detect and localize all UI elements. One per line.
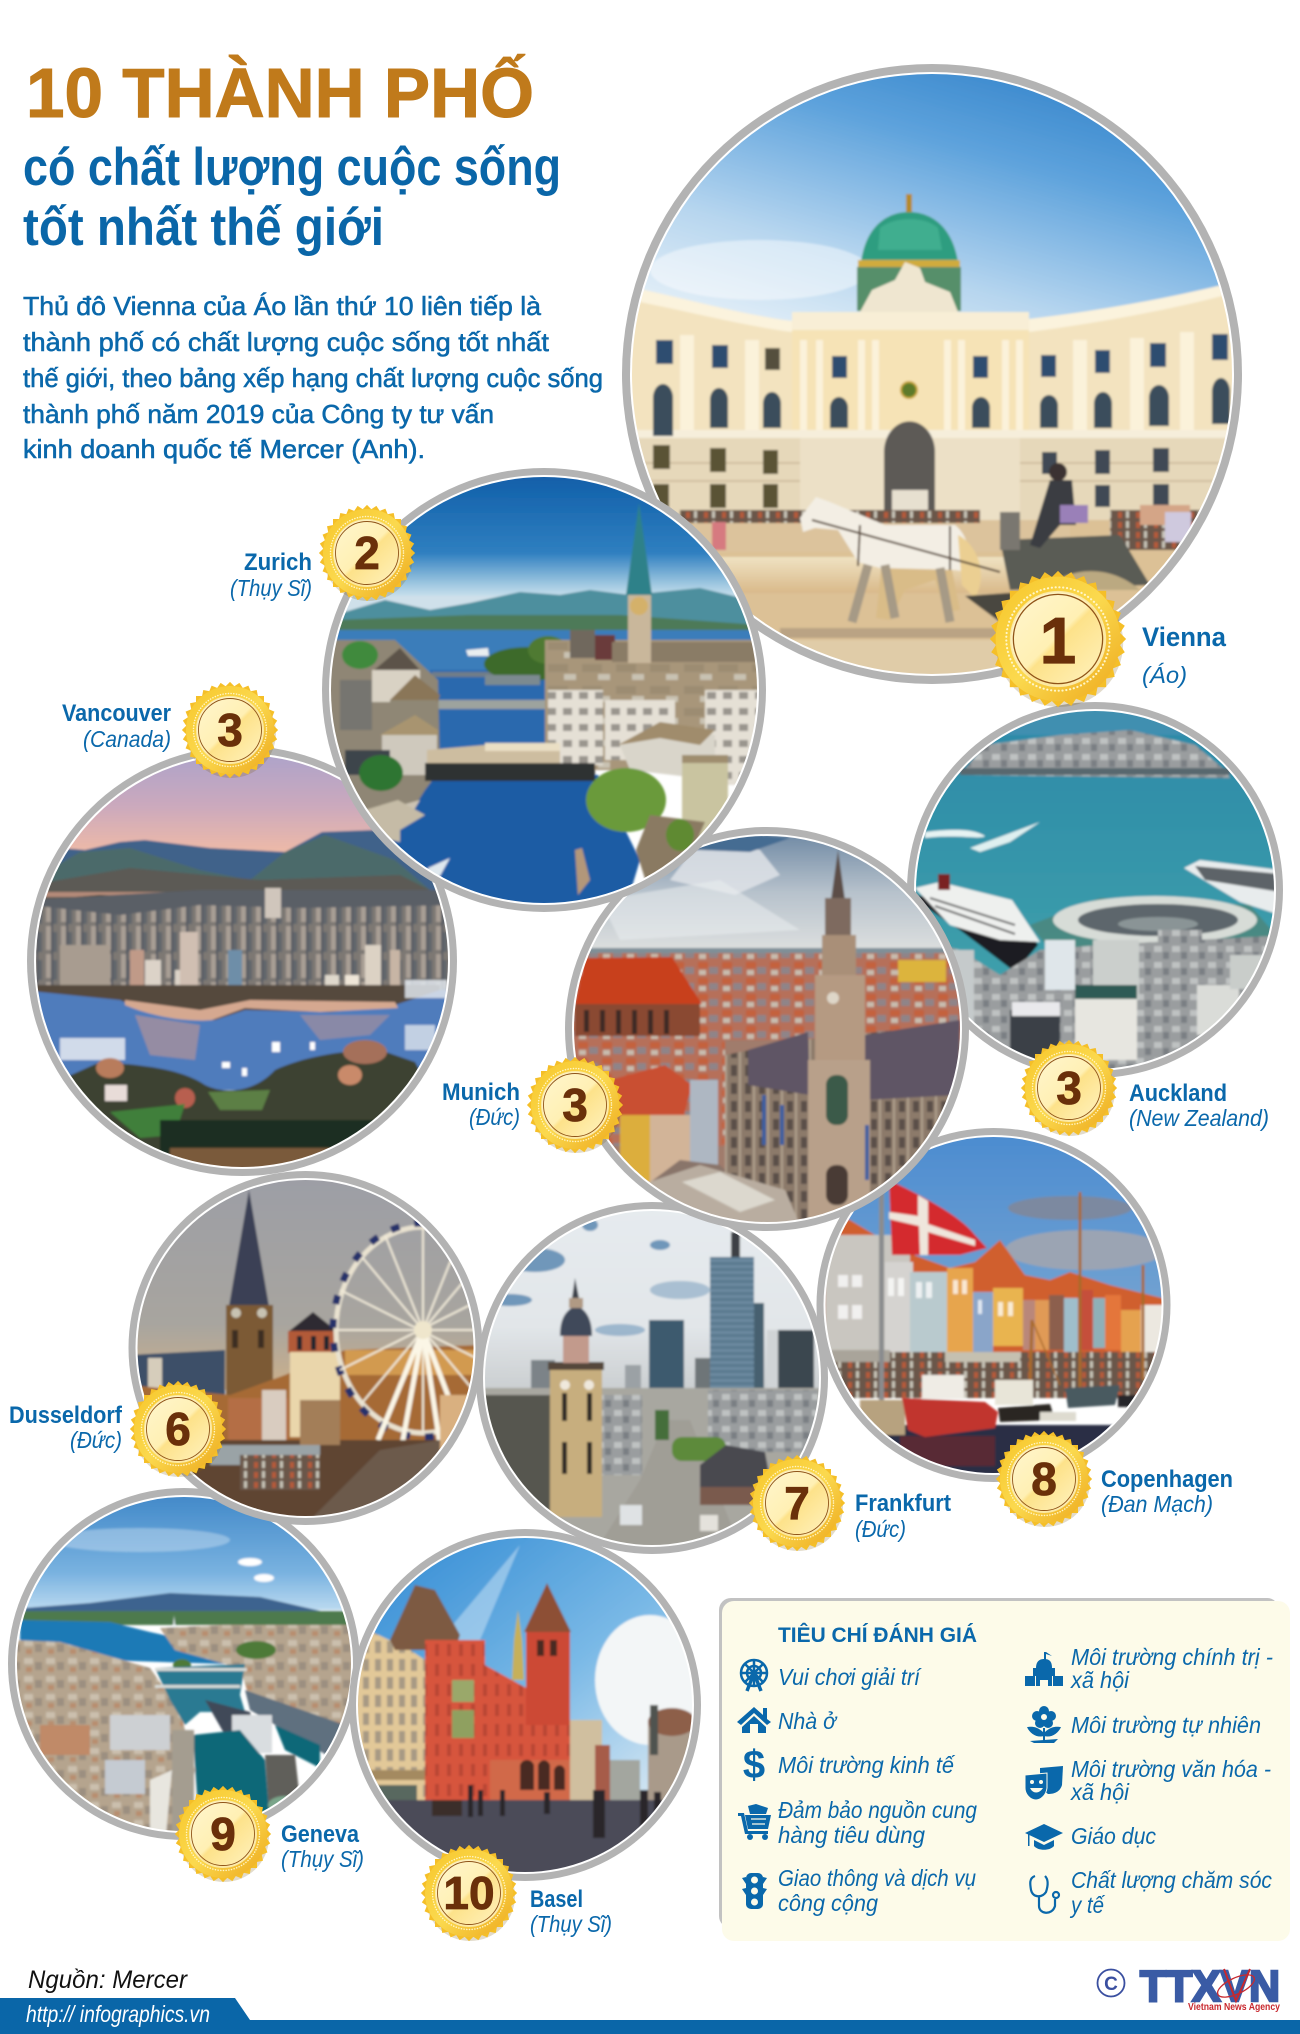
label: Zurich: Zurich	[244, 549, 312, 576]
Danish flag	[889, 1180, 987, 1255]
other boats	[995, 1380, 1144, 1422]
photo circle: Zurich	[320, 465, 770, 912]
dark roof building	[700, 1445, 772, 1490]
right bank buildings	[545, 630, 770, 845]
label: Basel	[530, 1886, 612, 1937]
label: Vancouver	[62, 700, 171, 752]
Schlossturm	[288, 1312, 340, 1437]
steamer	[466, 648, 489, 656]
text: housing: Nhà ở	[778, 1708, 838, 1734]
label: Dusseldorf: (Đức)	[70, 1427, 122, 1453]
icon: graduation cap	[1025, 1824, 1063, 1850]
label: Auckland	[1129, 1080, 1269, 1131]
text: nature: Môi trường tự nhiên	[1071, 1712, 1261, 1738]
Lake Geneva	[20, 1620, 232, 1664]
medal 9: 9	[210, 1808, 236, 1860]
label: Frankfurt: Frankfurt	[855, 1490, 951, 1517]
text: consumer goods: hàng tiêu dùng	[778, 1822, 925, 1848]
medal 3 Munich: 3	[562, 1079, 588, 1131]
label: Vancouver: Vancouver	[62, 700, 171, 727]
label: Basel: Basel	[530, 1886, 583, 1913]
Frauenkirche	[575, 957, 702, 1036]
medal 2	[319, 505, 415, 601]
mountains	[60, 828, 436, 892]
photo circle: Munich	[560, 825, 980, 1235]
medal 2: 2	[354, 527, 380, 579]
peninsula parkland	[70, 1038, 419, 1167]
photo circle: Dusseldorf	[125, 1170, 513, 1530]
Basel town hall	[390, 1583, 571, 1805]
text: transport: công cộng	[778, 1890, 878, 1916]
medal 1: 1	[1040, 604, 1076, 677]
Ferris wheel	[333, 1223, 513, 1445]
cruise ship left	[915, 874, 1040, 972]
label: Dusseldorf: Dusseldorf	[9, 1402, 123, 1429]
trees island	[484, 647, 570, 681]
Nyhavn facades	[826, 1218, 1162, 1354]
Rathaus tower	[808, 850, 870, 1230]
downtown towers	[952, 928, 1268, 1068]
text: politics: xã hội	[1070, 1667, 1130, 1693]
boat masts	[1030, 1192, 1143, 1390]
label: Geneva	[281, 1821, 364, 1872]
label: Basel: (Thụy Sĩ)	[530, 1911, 612, 1937]
label: Geneva: Geneva	[281, 1821, 360, 1848]
plaza ground	[717, 520, 1176, 642]
TTXVN logo: Vietnam News Agency	[1188, 2001, 1280, 2013]
label: Vienna	[1142, 622, 1227, 688]
back row buildings	[130, 1350, 225, 1400]
crowd	[680, 505, 1220, 550]
photo circle: Auckland	[900, 700, 1300, 1080]
downtown towers	[36, 886, 448, 990]
text: healthcare: Chất lượng chăm sóc	[1071, 1867, 1272, 1893]
intro paragraph: thế giới, theo bảng xếp hạng chất lượng cuộc sống	[23, 363, 603, 393]
photo circle: Geneva	[5, 1485, 365, 1845]
label: Zurich	[230, 549, 312, 601]
medal 3 Vancouver	[182, 682, 278, 778]
medal 7: 7	[784, 1477, 810, 1529]
label: Vienna: (Áo)	[1142, 662, 1187, 688]
Market square	[640, 1165, 800, 1225]
medal 9	[175, 1786, 271, 1882]
text: culture: Môi trường văn hóa -	[1071, 1756, 1271, 1782]
label: Copenhagen: Copenhagen	[1101, 1466, 1233, 1493]
intro paragraph	[23, 291, 603, 464]
label: Frankfurt	[855, 1490, 951, 1542]
pedestrians	[432, 1785, 661, 1838]
intro paragraph: thành phố có chất lượng cuộc sống tốt nhất	[23, 327, 550, 357]
palace facade	[620, 280, 1250, 522]
text: healthcare: y tế	[1069, 1892, 1106, 1918]
icon: house	[737, 1707, 771, 1733]
big tree	[586, 768, 666, 832]
St Catherine's church tower	[548, 1278, 604, 1517]
subtitle line 2: tốt nhất thế giới	[23, 198, 384, 257]
text: consumer goods: Đảm bảo nguồn cung	[778, 1797, 977, 1823]
subtitle line 1: có chất lượng cuộc sống	[23, 138, 561, 197]
text: culture: xã hội	[1070, 1779, 1130, 1805]
red boat	[902, 1375, 998, 1437]
Jet d'Eau	[172, 1616, 177, 1627]
intro paragraph: kinh doanh quốc tế Mercer (Anh).	[23, 434, 425, 464]
TTXVN logo: TTXVN	[1140, 1962, 1280, 2011]
cream corner building	[358, 1632, 427, 1802]
marinas	[60, 980, 447, 1076]
Rhône river	[155, 1664, 245, 1725]
label: Dusseldorf	[9, 1402, 123, 1453]
label: Vienna: Vienna	[1142, 622, 1227, 652]
source: Nguồn: Mercer	[28, 1966, 189, 1994]
legend title: TIÊU CHÍ ĐÁNH GIÁ	[778, 1623, 977, 1647]
street	[590, 1420, 745, 1560]
label: Munich: Munich	[442, 1079, 520, 1106]
church tower and spire	[226, 1190, 273, 1400]
medal 3 Vancouver: 3	[217, 704, 243, 756]
medal 10	[421, 1845, 517, 1941]
nave roof	[475, 1395, 552, 1530]
photo circle: Vancouver	[20, 745, 460, 1180]
text: consumer goods	[778, 1797, 977, 1848]
skyscrapers	[531, 1232, 814, 1394]
label: Munich	[442, 1079, 520, 1130]
medal 1	[990, 571, 1126, 707]
harbor water	[886, 1423, 1112, 1473]
intro paragraph: thành phố năm 2019 của Công ty tư vấn	[23, 399, 494, 429]
medal 6: 6	[165, 1403, 191, 1455]
label: Auckland: (New Zealand)	[1129, 1105, 1269, 1131]
left bank buildings	[320, 640, 440, 830]
text: entertainment: Vui chơi giải trí	[778, 1664, 922, 1690]
dome	[857, 194, 961, 312]
photo circle: Frankfurt	[475, 1200, 830, 1560]
city blocks	[475, 1388, 830, 1558]
bridges	[432, 672, 547, 709]
lower river	[388, 775, 640, 910]
cobbled square	[388, 1798, 663, 1872]
distant mountain	[26, 1592, 320, 1613]
label: Geneva: (Thụy Sĩ)	[281, 1846, 364, 1872]
label: Zurich: (Thụy Sĩ)	[230, 575, 312, 601]
label: Copenhagen: (Đan Mạch)	[1101, 1491, 1213, 1517]
icon: theatre masks	[1025, 1766, 1063, 1800]
medal 8: 8	[1031, 1453, 1057, 1505]
title: 10 THÀNH PHỐ	[26, 53, 534, 132]
cruise ship right	[1184, 860, 1280, 915]
label: Munich: (Đức)	[469, 1104, 520, 1130]
text: politics: Môi trường chính trị -	[1071, 1644, 1273, 1670]
label: Auckland: Auckland	[1129, 1080, 1227, 1107]
label: Copenhagen	[1101, 1466, 1233, 1517]
icon: capitol	[1025, 1652, 1063, 1686]
lower city	[130, 1345, 480, 1465]
text: education: Giáo dục	[1071, 1823, 1156, 1849]
intro paragraph: Thủ đô Vienna của Áo lần thứ 10 liên tiếp là	[23, 291, 542, 321]
upper river	[430, 670, 555, 760]
photo circle: Basel	[349, 1529, 710, 1885]
promenade	[125, 1395, 490, 1530]
icon: stethoscope	[1030, 1876, 1059, 1913]
label: Frankfurt: (Đức)	[855, 1516, 906, 1542]
text: politics	[1070, 1644, 1273, 1693]
photo circle: Copenhagen	[816, 1125, 1170, 1485]
medal 6	[130, 1381, 226, 1477]
photo circle: Vienna	[620, 60, 1250, 700]
label: Vancouver: (Canada)	[83, 726, 171, 752]
flag pole	[879, 1190, 884, 1435]
medal 3 Auckland	[1021, 1040, 1117, 1136]
legend panel	[719, 1598, 1290, 1941]
New Town Hall	[725, 1020, 970, 1220]
icon: ferris wheel	[741, 1660, 767, 1691]
medal 3 Auckland: 3	[1056, 1062, 1082, 1114]
mountains	[335, 588, 750, 632]
TTXVN logo: C	[1104, 1974, 1118, 1995]
Quay buildings	[205, 1690, 345, 1760]
text: economy: Môi trường kinh tế	[778, 1752, 956, 1778]
far city	[560, 950, 980, 1045]
text: healthcare	[1069, 1867, 1272, 1918]
icon: shopping cart	[738, 1804, 771, 1840]
icon: flower	[1027, 1706, 1061, 1743]
medal 10: 10	[443, 1867, 495, 1919]
city left bank	[10, 1640, 195, 1845]
Fraumünster spire	[626, 503, 652, 663]
stadium	[1030, 894, 1270, 948]
footer banner: http:// infographics.vn	[26, 2001, 210, 2027]
medal 3 Munich	[527, 1057, 623, 1153]
text: transport	[778, 1865, 976, 1916]
medal 7	[749, 1455, 845, 1551]
horses and carriage	[800, 463, 1150, 622]
icon: traffic light	[742, 1873, 767, 1909]
text: culture	[1070, 1756, 1271, 1805]
footer banner	[0, 1998, 1300, 2034]
city right bank	[159, 1624, 351, 1724]
False Creek water	[20, 990, 460, 1090]
weir deck	[425, 743, 595, 781]
medal 8	[996, 1431, 1092, 1527]
Theatine church	[898, 960, 946, 982]
icon: dollar: $	[743, 1743, 765, 1787]
Lake Zurich	[320, 630, 770, 685]
side street buildings	[570, 1705, 698, 1805]
harbor basin	[192, 1728, 270, 1812]
text: transport: Giao thông và dịch vụ	[778, 1865, 976, 1891]
Lower left blocks	[560, 1036, 735, 1225]
